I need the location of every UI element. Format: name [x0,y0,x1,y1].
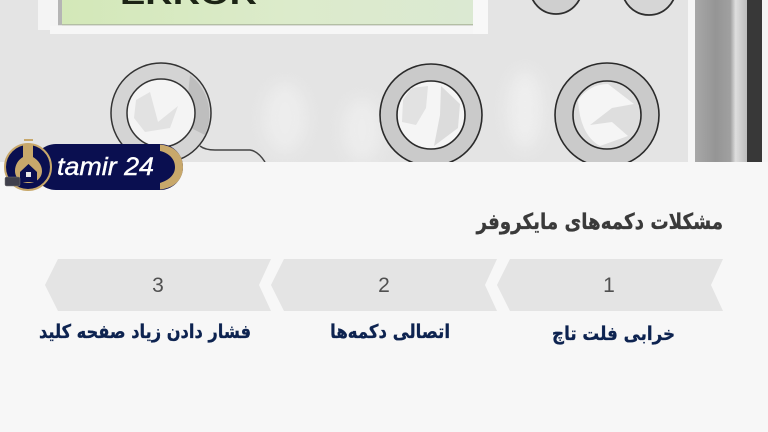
chevron step 2 [271,259,497,311]
button 3 [555,63,659,167]
chevron step 3: 3 [152,274,164,297]
chevron step 1 [497,259,723,311]
right metal strip [688,0,768,162]
photo: microwave control panel [0,0,768,167]
logo wrench with house [15,139,42,183]
chevron step 3 [45,259,271,311]
button 2 [380,64,482,166]
logo house [20,164,37,182]
logo: tamir 24 [5,139,183,190]
label step 3: فشار دادن زیاد صفحه کلید [39,322,251,343]
button 1 [111,63,265,163]
small top buttons [530,0,676,15]
chevron step 2: 2 [378,274,390,297]
chevron step 1: 1 [603,274,615,297]
label step 2: اتصالی دکمه‌ها [330,321,450,343]
logo wordmark: tamir 24 [57,153,154,181]
logo right crescent [160,144,183,190]
logo small badge [5,177,20,186]
lcd display [38,0,488,34]
label step 1: خرابی فلت تاچ [552,323,675,345]
logo ring [5,144,51,190]
heading: مشکلات دکمه‌های مایکروفر [476,208,723,234]
logo pill [33,144,183,190]
logo house window [26,172,31,177]
